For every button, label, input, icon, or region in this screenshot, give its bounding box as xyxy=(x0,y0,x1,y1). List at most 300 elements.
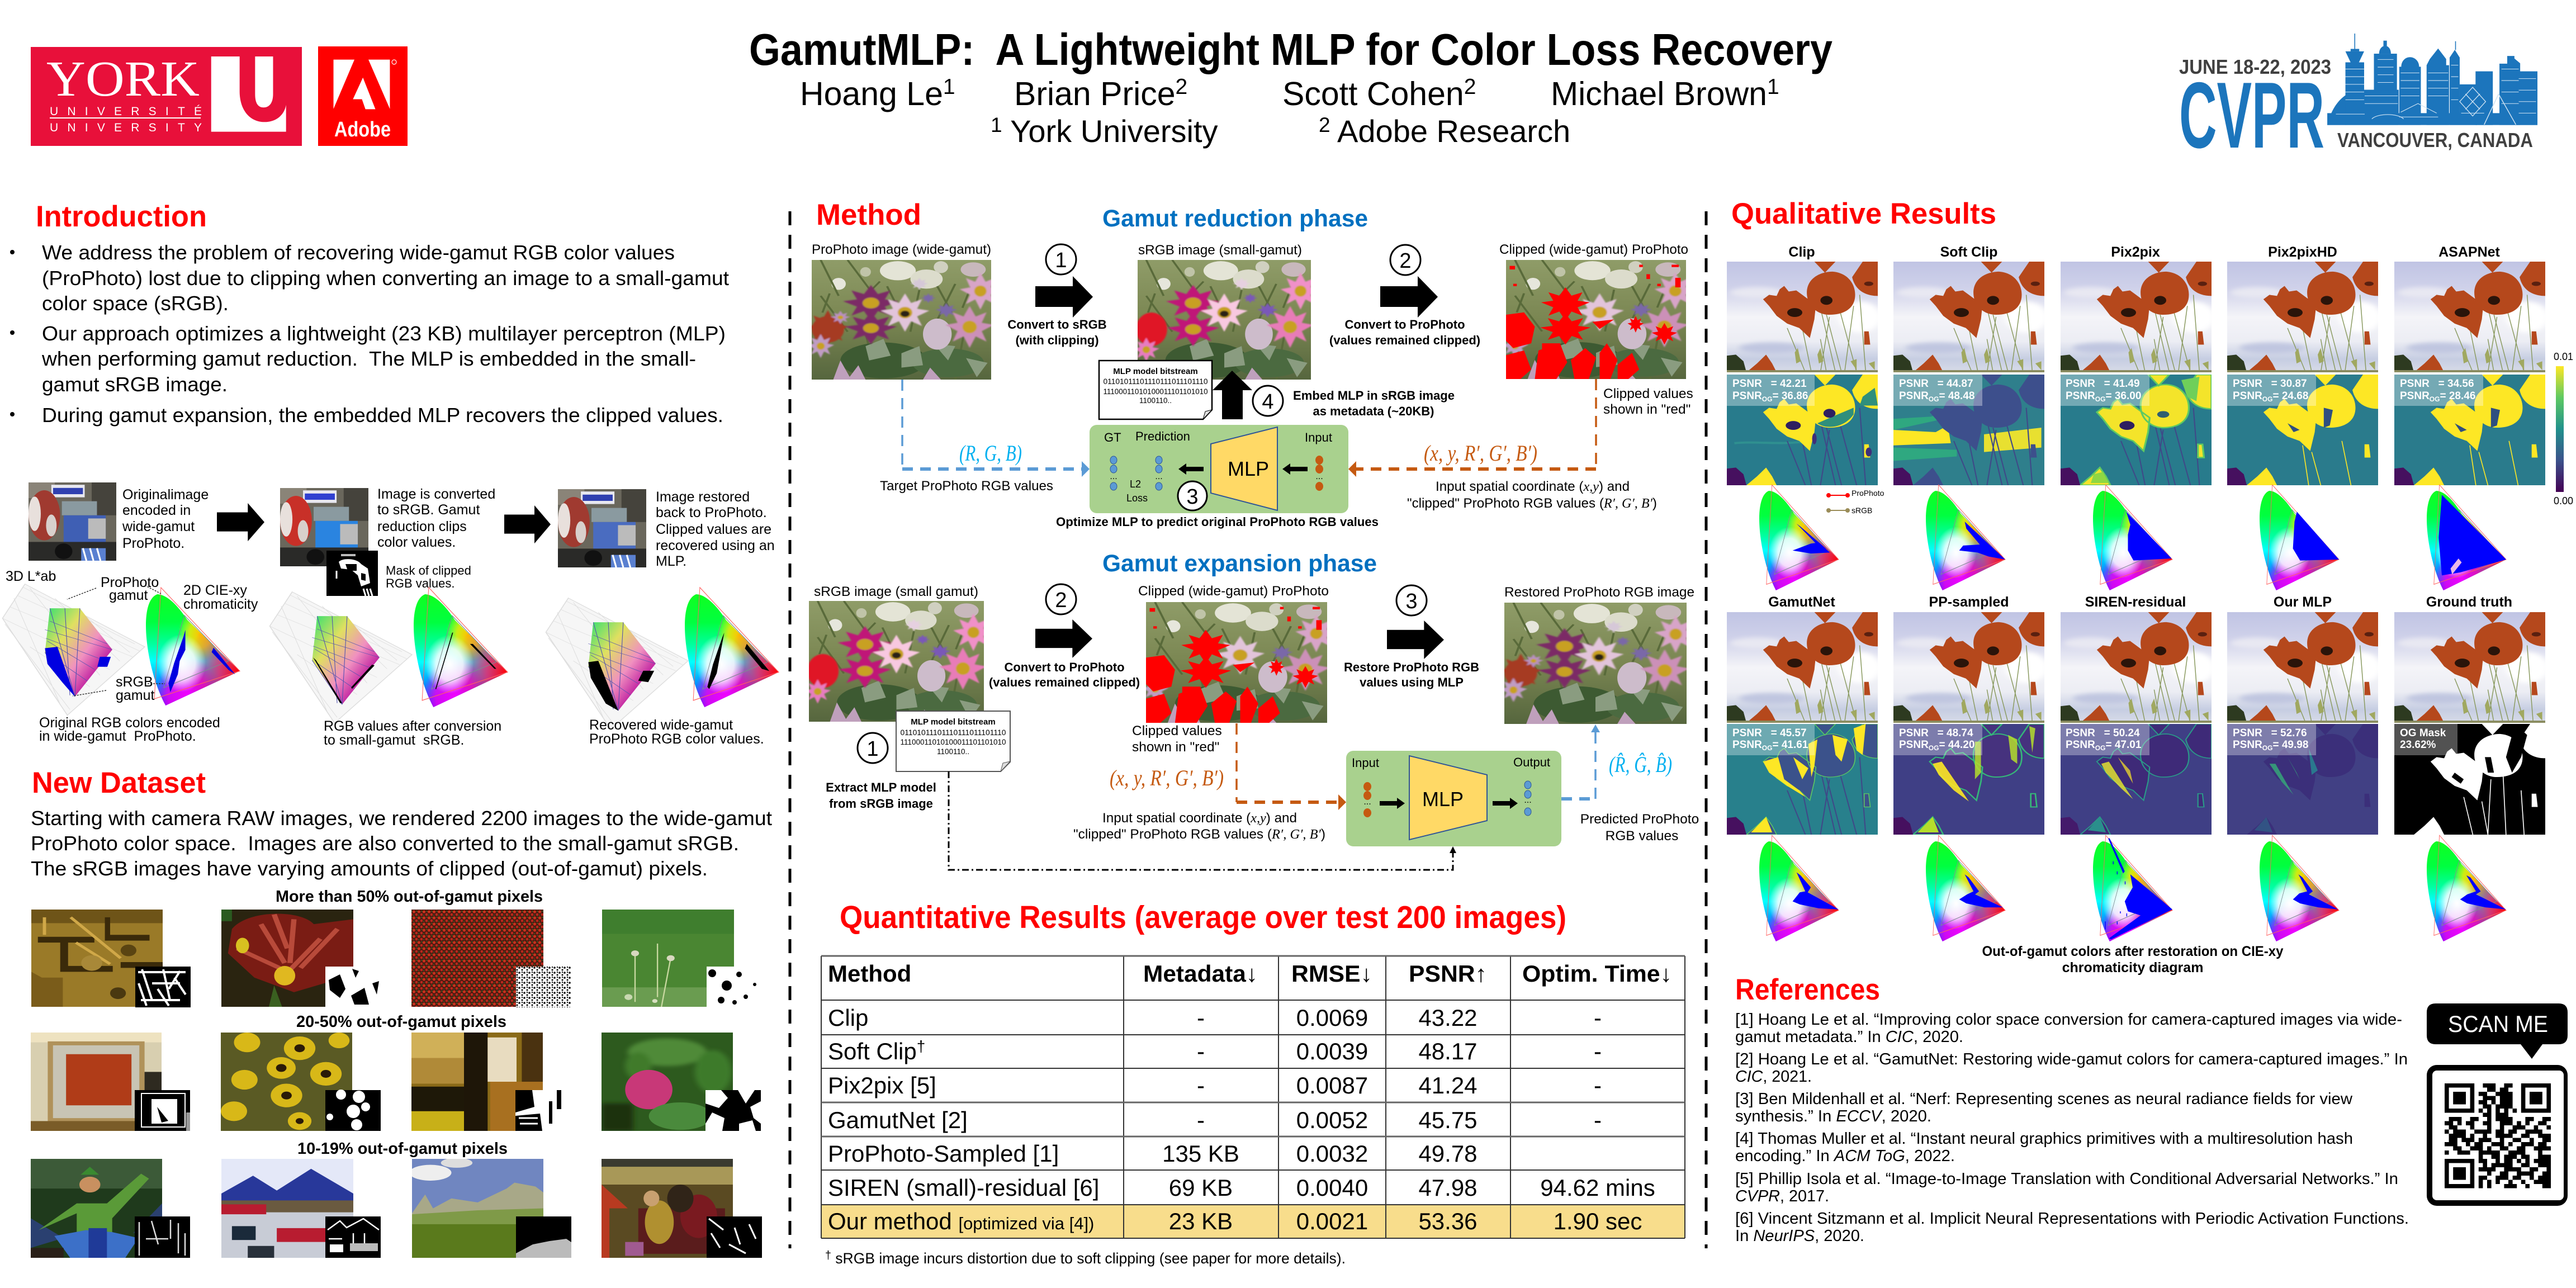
heatmaps row 1: PSNR = 42.21 xyxy=(1732,378,1807,390)
footnote: sRGB image incurs distortion due to soft clipping (see paper for more details). xyxy=(831,1250,1346,1267)
legend: gamut lines xyxy=(1826,489,1884,515)
image row: 20-50% xyxy=(31,1033,761,1131)
labels: 3D and chromaticity: 2D CIE-xy xyxy=(183,583,247,598)
table rows: 0.0087 xyxy=(1296,1072,1368,1098)
label: convert to ProPhoto: (values remained clipped) xyxy=(989,675,1140,689)
heatmaps row 2: PSNR xyxy=(1899,739,1929,751)
caption: recovered: Recovered wide-gamut xyxy=(589,717,733,733)
arrow xyxy=(217,503,264,541)
text block: bullets: We address the problem of recovering wide-gamut RGB color values xyxy=(42,241,675,264)
colorbar: 0.00 xyxy=(2554,495,2573,506)
arrow xyxy=(1035,619,1092,658)
step 3 number xyxy=(1396,585,1427,615)
label: convert to ProPhoto: Convert to ProPhoto xyxy=(1004,660,1125,674)
text block: dataset description xyxy=(31,807,772,880)
chart: CIE clipped xyxy=(413,588,509,708)
note: MLP bitstream xyxy=(896,711,1010,771)
label: ProPhoto image: ProPhoto image (wide-gamut) xyxy=(812,242,991,257)
caption: recovered: ProPhoto RGB color values. xyxy=(589,731,764,747)
heatmaps row 1: PSNR = 34.56 xyxy=(2400,378,2474,390)
heading: Method: Method xyxy=(816,198,921,231)
labels: 3D and chromaticity xyxy=(6,569,258,703)
table rows: 41.24 xyxy=(1418,1072,1478,1098)
panel: MLP inference: MLP xyxy=(1422,788,1464,811)
column headers row 2: Our MLP xyxy=(2274,594,2332,610)
arrow xyxy=(504,505,551,543)
panel: quantitative results xyxy=(821,899,1685,1267)
image: ProPhoto flowers xyxy=(807,260,1001,380)
text: restored image: Image restored xyxy=(656,489,750,505)
heading: 20-50%: 20-50% out-of-gamut pixels xyxy=(296,1013,506,1031)
table rows: † xyxy=(917,1038,925,1055)
label: convert to ProPhoto: Convert to ProPhoto xyxy=(1344,318,1465,332)
caption: after conversion: RGB values after conversion xyxy=(324,718,501,734)
heatmaps row 1 xyxy=(1727,375,2545,485)
text block: bullets: gamut sRGB image. xyxy=(42,373,228,396)
text block: bullets: color space (sRGB). xyxy=(42,292,229,315)
table header: RMSE↓ xyxy=(1291,960,1372,987)
logo: York University xyxy=(31,47,302,146)
label: input spatial coordinate: "clipped" ProPhoto RGB values (R′, G′, B′) xyxy=(1407,496,1657,511)
heatmaps row 1: OG xyxy=(2262,395,2272,403)
text block: reference list: CVPR, 2017. xyxy=(1735,1187,1829,1205)
heatmaps row 1: = 36.00 xyxy=(2105,390,2141,402)
labels: 3D and chromaticity: chromaticity xyxy=(183,596,258,612)
label: extract MLP: from sRGB image xyxy=(829,797,933,811)
table rows: 49.78 xyxy=(1418,1140,1478,1167)
authors: Scott Cohen xyxy=(1282,75,1464,112)
panel: MLP inference: Output xyxy=(1513,755,1550,769)
labels: 3D and chromaticity: ProPhoto xyxy=(101,575,159,590)
masks xyxy=(135,1216,762,1258)
label: clipped ProPhoto: Clipped (wide-gamut) ProPhoto xyxy=(1499,242,1688,257)
label: input spatial coordinate: Input spatial coordinate (x,y) and xyxy=(1436,479,1630,494)
table rows: 23 KB xyxy=(1169,1208,1233,1234)
label: optimize MLP: Optimize MLP to predict original ProPhoto RGB values xyxy=(1056,515,1379,529)
text block: reference list: [2] Hoang Le et al. “GamutNet: Restoring wide-gamut colors for camera-captured images.” In xyxy=(1735,1050,2408,1068)
table rows: Soft Clip xyxy=(828,1038,917,1064)
text block: reference list: synthesis.” In ECCV, 2020. xyxy=(1735,1107,1931,1125)
column headers row 2: GamutNet xyxy=(1768,594,1835,610)
text: original image: wide-gamut xyxy=(122,519,195,534)
text block: dataset description: The sRGB images have varying amounts of clipped (out-of-gamut) pixels. xyxy=(31,857,708,880)
authors: Brian Price xyxy=(1014,75,1176,112)
heading: quantitative results: Quantitative Results (average over test 200 images) xyxy=(840,899,1566,935)
column headers row 1: Pix2pix xyxy=(2111,244,2160,260)
column headers row 2: SIREN-residual xyxy=(2085,594,2186,610)
table rows: - xyxy=(1197,1038,1205,1064)
logo: CVPR 2023 Vancouver: VANCOUVER, CANADA xyxy=(2337,129,2533,151)
label: clipped values: Clipped values xyxy=(1132,723,1222,738)
text: conversion: to sRGB. Gamut xyxy=(377,502,480,518)
panel: MLP training: ... xyxy=(1155,472,1163,481)
heatmaps row 1: = 36.86 xyxy=(1772,390,1808,402)
table rows: 94.62 mins xyxy=(1540,1175,1655,1201)
panel: MLP training: L2 xyxy=(1130,479,1141,490)
heatmaps row 2: PSNR xyxy=(2233,739,2262,751)
label: embed MLP: Embed MLP in sRGB image xyxy=(1293,389,1455,402)
note: MLP bitstream: 11100011010100011101101010 xyxy=(1104,387,1208,396)
panel: introduction xyxy=(10,200,729,427)
text block: bullets: when performing gamut reduction. The MLP is embedded in the small- xyxy=(41,347,696,370)
affiliations: York University xyxy=(1002,113,1218,149)
label: convert to sRGB: (with clipping) xyxy=(1015,333,1099,347)
label: input spatial coordinate xyxy=(1407,479,1657,511)
column headers row 1 xyxy=(1788,244,2501,260)
panel: MLP inference: Input xyxy=(1352,756,1379,770)
heatmaps row 2: PSNR = 52.76 xyxy=(2233,727,2307,739)
heatmaps row 2: PSNR = 50.24 xyxy=(2066,727,2140,739)
step 2 number xyxy=(1046,584,1076,614)
table rows: - xyxy=(1594,1038,1602,1064)
heatmaps row 2: PSNR xyxy=(1732,739,1762,751)
divider: right column xyxy=(1705,211,1707,1248)
heading: gamut reduction phase: Gamut reduction phase xyxy=(1102,205,1368,232)
table rows: - xyxy=(1197,1072,1205,1098)
table rows: 135 KB xyxy=(1162,1140,1239,1167)
step 4 number: 4 xyxy=(1262,390,1274,414)
table rows: 43.22 xyxy=(1418,1005,1478,1031)
colorbar: 0.01 xyxy=(2554,351,2573,362)
text: original image: Originalimage xyxy=(122,487,209,503)
label: restore ProPhoto: values using MLP xyxy=(1360,675,1464,689)
panel: method xyxy=(804,198,1699,870)
legend: gamut lines: ProPhoto xyxy=(1852,489,1884,498)
masks xyxy=(135,967,762,1007)
text: restored image: recovered using an xyxy=(656,538,775,553)
affiliations: Adobe Research xyxy=(1330,113,1570,149)
caption: original colors: in wide-gamut ProPhoto. xyxy=(39,728,196,744)
table rows: 0.0040 xyxy=(1296,1175,1368,1201)
logo: York University: UNIVERSITÉ xyxy=(50,105,202,118)
colorbar xyxy=(2554,351,2573,506)
table rows: 0.0052 xyxy=(1296,1107,1368,1133)
caption: CIE chart: chromaticity diagram xyxy=(2062,960,2203,976)
column headers row 2: PP-sampled xyxy=(1929,594,2009,610)
affiliations: 1 xyxy=(991,113,1002,136)
table rows: 48.17 xyxy=(1418,1038,1478,1064)
authors: 1 xyxy=(1767,75,1779,99)
label: clipped ProPhoto: Clipped (wide-gamut) ProPhoto xyxy=(1138,584,1329,599)
table rows: 69 KB xyxy=(1169,1175,1233,1201)
heatmaps row 1: PSNR = 44.87 xyxy=(1899,378,1973,390)
heatmaps row 2: PSNR xyxy=(2066,739,2095,751)
logo: Adobe xyxy=(318,46,408,146)
authors: 1 xyxy=(943,75,955,99)
table rows: GamutNet [2] xyxy=(828,1107,968,1133)
arrow: target dashed xyxy=(902,380,1090,477)
text: conversion xyxy=(377,486,495,550)
math: predicted RGB: (R̂, Ĝ, B̂) xyxy=(1609,752,1672,777)
arrow: embed xyxy=(1213,371,1252,419)
text: conversion: Image is converted xyxy=(377,486,495,502)
label: clipped values: Clipped values xyxy=(1603,386,1693,401)
text block: bullets: (ProPhoto) lost due to clipping when converting an image to a small-gamut xyxy=(42,267,729,290)
text block: bullets: Our approach optimizes a lightweight (23 KB) multilayer perceptron (MLP) xyxy=(42,322,726,345)
table rows: - xyxy=(1197,1005,1205,1031)
heatmaps row 1: PSNR xyxy=(2233,390,2262,402)
step 1 number: 1 xyxy=(1055,249,1067,272)
text block: reference list: CIC, 2021. xyxy=(1735,1068,1812,1086)
table rows: - xyxy=(1594,1072,1602,1098)
heading: Introduction: Introduction xyxy=(36,200,207,233)
arrow xyxy=(1035,276,1093,318)
label: convert to ProPhoto: (values remained clipped) xyxy=(1329,333,1480,347)
callout: scan me xyxy=(2427,1003,2568,1059)
panel: qualitative results xyxy=(1727,197,2573,976)
label: convert to ProPhoto xyxy=(1329,318,1480,347)
text block: bullets xyxy=(10,241,729,427)
panel: MLP training: GT xyxy=(1104,430,1121,444)
table rows: - xyxy=(1594,1107,1602,1133)
masks xyxy=(135,1090,761,1131)
heatmaps row 2: PSNR = 45.57 xyxy=(1732,727,1807,739)
heatmaps row 1: PSNR xyxy=(1899,390,1929,402)
label: input spatial coordinate: Input spatial coordinate (x,y) and xyxy=(1102,811,1297,826)
label: clipped values: shown in "red" xyxy=(1132,740,1219,755)
heatmaps row 1: OG xyxy=(2095,395,2105,403)
text block: reference list: In NeurIPS, 2020. xyxy=(1735,1227,1864,1245)
heatmaps row 2 xyxy=(1727,724,2545,835)
chart: CIE original xyxy=(145,588,241,707)
label: predicted values: RGB values xyxy=(1606,828,1678,844)
table header xyxy=(828,960,1672,987)
label: predicted values: Predicted ProPhoto xyxy=(1580,812,1699,827)
text: restored image xyxy=(656,489,775,569)
heatmaps row 2: OG xyxy=(1929,744,1939,752)
label: restore ProPhoto: Restore ProPhoto RGB xyxy=(1344,660,1479,674)
caption: after conversion: to small-gamut sRGB. xyxy=(324,732,464,748)
note: MLP bitstream xyxy=(1099,361,1212,419)
logo: Adobe: Adobe xyxy=(334,118,391,141)
heatmaps row 1: = 28.46 xyxy=(2440,390,2475,402)
text block: reference list: encoding.” In ACM ToG, 2022. xyxy=(1735,1147,1955,1165)
label: embed MLP xyxy=(1293,389,1455,418)
logo: York University: YORK xyxy=(46,51,200,107)
text: original image xyxy=(122,487,209,551)
step 3 number: 3 xyxy=(1405,590,1418,613)
caption: recovered xyxy=(589,717,764,747)
panel: MLP training: ... xyxy=(1315,472,1323,481)
caption: after conversion xyxy=(324,718,501,748)
heading: New Dataset: New Dataset xyxy=(32,766,206,799)
logo: CVPR 2023 Vancouver: CVPR xyxy=(2179,63,2324,168)
title: GamutMLP: A Lightweight MLP for Color Loss Recovery xyxy=(749,25,1832,74)
table rows: 0.0021 xyxy=(1296,1208,1368,1234)
caption: CIE chart xyxy=(1982,944,2284,976)
column headers row 1: ASAPNet xyxy=(2438,244,2501,260)
table rows: - xyxy=(1197,1107,1205,1133)
column headers row 2: Ground truth xyxy=(2426,594,2512,610)
chart: 3D gamut recovered xyxy=(546,598,688,729)
step 1 number xyxy=(1046,244,1076,274)
heatmaps row 2: OG xyxy=(1762,744,1772,752)
label: input spatial coordinate: "clipped" ProPhoto RGB values (R′, G′, B′) xyxy=(1073,827,1325,842)
panel: gamut illustration xyxy=(2,482,780,748)
heatmaps row 1: = 48.48 xyxy=(1939,390,1974,402)
arrow xyxy=(1380,276,1438,318)
panel: MLP training: 3 xyxy=(1186,485,1199,509)
labels: 3D and chromaticity: sRGB xyxy=(116,674,153,690)
label: target values: Target ProPhoto RGB values xyxy=(880,479,1053,494)
note: MLP bitstream: MLP model bitstream xyxy=(911,717,996,727)
affiliations xyxy=(991,113,1570,149)
logo: CVPR 2023 Vancouver: JUNE 18-22, 2023 xyxy=(2179,55,2331,78)
label: restore ProPhoto xyxy=(1344,660,1479,689)
table rows: 0.0032 xyxy=(1296,1140,1368,1167)
heatmaps row 1: PSNR = 30.87 xyxy=(2233,378,2307,390)
text: conversion: color values. xyxy=(377,534,456,550)
text block: reference list: [4] Thomas Muller et al. “Instant neural graphics primitives with a multiresolution hash xyxy=(1735,1130,2353,1148)
heatmaps row 2: 23.62% xyxy=(2400,739,2436,751)
arrow xyxy=(1387,621,1444,659)
logo: York University: UNIVERSITY xyxy=(50,121,202,134)
label: sRGB image: sRGB image (small gamut) xyxy=(814,584,978,599)
column headers row 1: Soft Clip xyxy=(1940,244,1997,260)
photos row 2 xyxy=(1727,612,2548,723)
labels: 3D and chromaticity: gamut xyxy=(109,588,148,603)
heatmaps row 2: PSNR = 48.74 xyxy=(1899,727,1973,739)
image row: 10-19% xyxy=(31,1158,762,1258)
table rows: Our method [optimized via [4]) xyxy=(828,1208,1094,1234)
caption: original colors xyxy=(39,715,220,744)
table rows: 0.0039 xyxy=(1296,1038,1368,1064)
panel: MLP training: Prediction xyxy=(1135,429,1190,443)
heading: qualitative results: Qualitative Results xyxy=(1731,197,1996,230)
label: extract MLP xyxy=(826,780,936,811)
logo: CVPR 2023 Vancouver xyxy=(2179,34,2537,168)
label: predicted values xyxy=(1580,812,1699,844)
heading: 10-19%: 10-19% out-of-gamut pixels xyxy=(297,1140,508,1158)
heatmaps row 2: OG xyxy=(2262,744,2272,752)
authors: Michael Brown xyxy=(1551,75,1767,112)
table rows: Clip xyxy=(828,1005,868,1031)
label: convert to sRGB xyxy=(1007,318,1107,347)
divider: left column xyxy=(788,211,792,1248)
heading: references: References xyxy=(1735,973,1880,1006)
text block: dataset description: Starting with camera RAW images, we rendered 2200 images to the wide-gamut xyxy=(31,807,772,830)
image: sRGB flowers xyxy=(804,601,993,722)
panel: MLP training: Input xyxy=(1305,430,1332,444)
text: conversion: reduction clips xyxy=(377,519,467,534)
label: convert to sRGB: Convert to sRGB xyxy=(1007,318,1107,332)
panel: MLP training xyxy=(1090,425,1348,513)
text block: reference list: gamut metadata.” In CIC, 2020. xyxy=(1735,1028,1963,1046)
heading: more than 50%: More than 50% out-of-gamut pixels xyxy=(276,888,543,906)
note: MLP bitstream: 1100110.. xyxy=(937,747,969,756)
label: clipped values xyxy=(1132,723,1222,755)
image: sRGB truck xyxy=(280,488,368,566)
step 2 number: 2 xyxy=(1399,249,1412,273)
heatmaps row 1: = 24.68 xyxy=(2272,390,2308,402)
step 4 number xyxy=(1253,386,1283,416)
heatmaps row 2: OG xyxy=(2095,744,2105,752)
legend: gamut lines: sRGB xyxy=(1852,506,1872,515)
panel: new dataset xyxy=(31,766,772,1258)
heatmaps row 2: = 41.61 xyxy=(1772,739,1808,751)
panel: references xyxy=(1735,973,2409,1245)
heatmaps row 2: = 44.20 xyxy=(1939,739,1974,751)
text: restored image: Clipped values are xyxy=(656,522,771,537)
step 1 number: 1 xyxy=(866,737,879,761)
note: MLP bitstream: 01101011101110111011101110 xyxy=(1104,377,1208,386)
heatmaps row 1: OG xyxy=(1929,395,1939,403)
chart: CIE recovered xyxy=(684,588,780,708)
text: original image: encoded in xyxy=(122,503,191,518)
table rows: 1.90 sec xyxy=(1554,1208,1642,1234)
image: restored flowers xyxy=(1500,603,1697,724)
label: sRGB image: sRGB image (small-gamut) xyxy=(1138,243,1302,258)
label: convert to ProPhoto xyxy=(989,660,1140,689)
labels: 3D and chromaticity: 3D L*ab xyxy=(6,569,56,584)
panel: MLP inference: ... xyxy=(1524,795,1532,805)
step 1 number xyxy=(858,733,888,763)
heatmaps row 1: OG xyxy=(2430,395,2440,403)
heatmaps row 2: OG Mask xyxy=(2400,727,2446,739)
caption: CIE chart: Out-of-gamut colors after restoration on CIE-xy xyxy=(1982,944,2284,959)
heatmaps row 1: PSNR xyxy=(2066,390,2095,402)
panel: MLP training: MLP xyxy=(1228,457,1269,480)
column headers row 1: Clip xyxy=(1788,244,1815,260)
heading: gamut expansion phase: Gamut expansion phase xyxy=(1102,550,1377,577)
authors: 2 xyxy=(1464,75,1476,99)
heatmaps row 1: PSNR = 41.49 xyxy=(2066,378,2140,390)
text: mask label: RGB values. xyxy=(386,576,455,590)
table rows: 47.98 xyxy=(1418,1175,1478,1201)
text block: bullets: During gamut expansion, the embedded MLP recovers the clipped values. xyxy=(42,404,723,427)
table rows: - xyxy=(1594,1005,1602,1031)
text block: dataset description: ProPhoto color space. Images are also converted to the small-gamut sRGB. xyxy=(31,832,739,855)
arrow: output dashed xyxy=(1561,724,1600,799)
image: restored truck xyxy=(558,489,646,567)
table header: Optim. Time↓ xyxy=(1522,960,1672,987)
label: restored image: Restored ProPhoto RGB image xyxy=(1504,585,1694,600)
arrow: dash-dot metadata path xyxy=(949,771,1456,870)
heatmaps row 1: OG xyxy=(1762,395,1772,403)
table rows xyxy=(828,1005,1655,1234)
panel: MLP training: ... xyxy=(1110,472,1117,481)
text block: reference list: [3] Ben Mildenhall et al. “Nerf: Representing scenes as neural radiance fields for view xyxy=(1735,1090,2353,1108)
QR code xyxy=(2427,1065,2568,1206)
heatmaps row 2: = 47.01 xyxy=(2105,739,2142,751)
column headers row 1: Pix2pixHD xyxy=(2268,244,2337,260)
column headers row 2 xyxy=(1768,594,2512,610)
step 2 number xyxy=(1390,245,1420,275)
math: RGB: (R, G, B) xyxy=(959,441,1022,466)
label: input spatial coordinate xyxy=(1073,811,1325,842)
label: clipped values: shown in "red" xyxy=(1603,402,1690,417)
math: input coordinates: (x, y, R′, G′, B′) xyxy=(1110,765,1224,790)
panel: MLP inference: ... xyxy=(1363,797,1371,807)
image: clipped flowers xyxy=(1142,602,1337,723)
CIE charts row 2 xyxy=(1759,835,2507,943)
authors: 2 xyxy=(1176,75,1187,99)
callout: scan me: SCAN ME xyxy=(2448,1011,2548,1037)
table rows: 53.36 xyxy=(1418,1208,1478,1234)
footnote: † xyxy=(825,1249,831,1262)
label: clipped values xyxy=(1603,386,1693,417)
table header: Metadata↓ xyxy=(1143,960,1258,987)
affiliations: 2 xyxy=(1319,113,1330,136)
panel: MLP inference xyxy=(1346,751,1561,846)
table header: Method xyxy=(828,960,911,987)
text: mask label xyxy=(386,564,471,590)
table rows: ProPhoto-Sampled [1] xyxy=(828,1140,1059,1167)
authors: Hoang Le xyxy=(800,75,943,112)
table header: PSNR↑ xyxy=(1409,960,1487,987)
caption: original colors: Original RGB colors encoded xyxy=(39,715,220,731)
text block: reference list: [5] Phillip Isola et al. “Image-to-Image Translation with Conditional Adversarial Networks.” In xyxy=(1735,1170,2398,1188)
